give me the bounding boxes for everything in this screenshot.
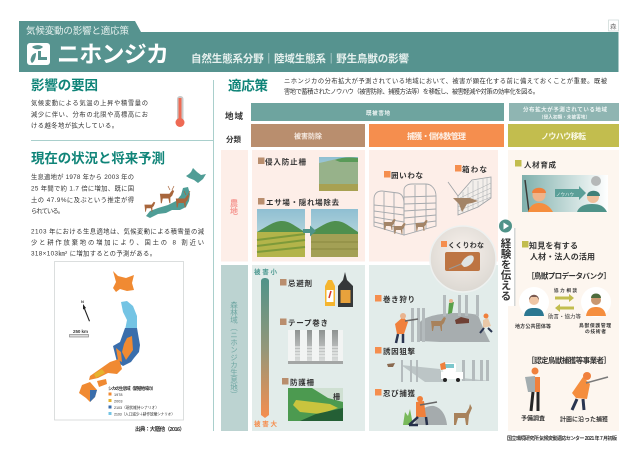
illustration: know-how transfer: ノウハウ — [556, 191, 574, 197]
corner marker — [608, 20, 618, 31]
band: forecast regions: （侵入初期・未被害地） — [539, 114, 590, 120]
band: affected regions — [251, 103, 504, 121]
label: stalking: 忍び捕獲 — [383, 388, 416, 398]
label: corral trap: 囲いわな — [391, 171, 424, 180]
label: wildlife experts: 鳥獣保護管理 — [579, 322, 611, 329]
label: training — [515, 160, 556, 170]
map legend: 2003 — [114, 400, 122, 404]
label: clear feeding grounds: エサ場・隠れ場除去 — [266, 197, 340, 207]
scale bar — [70, 329, 88, 337]
illustration: box trap — [448, 177, 491, 215]
label: planned capture: 計画に沿った捕獲 — [560, 416, 608, 424]
text: future forecast — [31, 226, 205, 258]
text: adaptation intro: 害地で蓄積されたノウハウ（被害防除、捕獲方法等）を移転し、被害軽減や対策の効率化を図る。 — [284, 86, 539, 96]
band: forecast regions: 分布拡大が予測されている地域 — [523, 106, 607, 114]
icon: deer emblem — [27, 43, 50, 65]
illustration: survey worker — [525, 368, 540, 411]
category: damage prevention — [251, 124, 365, 147]
map legend: 2103（現状維持シナリオ） — [114, 405, 159, 410]
callout: pass on experience: 経験を伝える — [500, 237, 512, 301]
map legend: 2103（人口減少＋耕作放棄シナリオ） — [114, 412, 175, 416]
map: Shikoku — [97, 379, 107, 387]
label: expertise: 知見を有する — [529, 240, 578, 250]
illustration: know-how transfer — [522, 175, 608, 212]
label: drive hunting: 巻き狩り — [383, 294, 415, 304]
illustration: data bank exchange: 助言・協力等 — [548, 312, 581, 320]
header banner — [19, 21, 618, 72]
illustration: stalking hunter — [403, 396, 472, 425]
panel: farmland capture — [369, 150, 498, 262]
subtitle: 自然生態系分野｜陸域生態系｜野生鳥獣の影響 — [191, 52, 410, 65]
text: adaptation intro — [284, 76, 608, 96]
band: forecast regions — [509, 103, 619, 121]
label: expertise — [522, 240, 595, 262]
illustration: drive hunting — [395, 295, 492, 343]
text: future forecast: 318×103㎞² に増加するとの予測がある。 — [31, 248, 156, 258]
row label: category: 分類 — [226, 134, 242, 144]
callout circle: snare trap — [430, 226, 496, 292]
map: deer habitat — [54, 262, 184, 420]
panel: forest prevention — [252, 265, 365, 431]
map source: 出典：大膳他（2016） — [135, 425, 185, 433]
map: central Honshu — [113, 328, 140, 366]
corner marker: 森 — [610, 22, 617, 30]
label: protective fence — [282, 377, 314, 387]
label: repellent — [280, 278, 312, 288]
photo: fence field — [319, 157, 358, 191]
map legend: シカの生息域（繁殖地域の） — [108, 385, 156, 392]
scale bar: 250 km — [73, 329, 88, 334]
heading: pro data bank: ［鳥獣プロデータバンク］ — [527, 270, 611, 280]
text: causes body — [31, 98, 148, 130]
illustration: Japan with deer — [144, 168, 206, 218]
heading: adaptation: 適応策 — [228, 78, 268, 94]
map: Hokkaido — [113, 271, 134, 292]
category: capture: 捕獲・個体数管理 — [407, 131, 466, 141]
category: know-how — [508, 124, 619, 147]
icon: repellent bottles — [325, 272, 353, 307]
illustration: truck shooting — [387, 360, 490, 382]
label: pre-survey: 予備調査 — [521, 414, 545, 422]
label: local government: 地方公共団体等 — [515, 323, 551, 330]
text: causes body: ける越冬地が拡大している。 — [31, 120, 118, 130]
heading: present and future: 現在の状況と将来予測 — [31, 150, 165, 166]
illustration: fenced plantation — [288, 388, 343, 421]
gradient bar: damage scale — [261, 278, 269, 418]
illustration: hunter aiming — [572, 372, 608, 410]
text: adaptation intro: ニホンジカの分布拡大が予測されている地域において、被害が顕在化する前に備えておくことが重要。既被 — [284, 76, 608, 85]
illustration: data bank exchange: 協力相談 — [554, 287, 578, 294]
header tab label: 気候変動の影響と適応策 — [26, 25, 129, 37]
illustration: snare in soil — [445, 252, 480, 271]
panel: farmland prevention — [252, 150, 365, 262]
photo: overgrown field — [257, 209, 305, 257]
label: snare trap: くくりわな — [448, 240, 484, 250]
label: more damage: 被害大 — [254, 419, 278, 428]
label: box trap: 箱わな — [462, 164, 488, 174]
map: western Honshu — [89, 359, 122, 380]
text: causes body: 気候変動による気温の上昇や積雪量の — [31, 98, 148, 107]
icon: play arrow — [499, 220, 512, 232]
title: ニホンジカ — [57, 41, 169, 67]
row label: farmland: 農地 — [230, 198, 238, 215]
heading: causes: 影響の要因 — [31, 77, 98, 93]
illustration: corral trap — [374, 184, 436, 235]
row label: forest: 森林域（ニホンジカ生息地） — [229, 300, 238, 398]
photo: cleared field — [311, 209, 358, 257]
icon: thermometer — [176, 96, 184, 127]
panel: forest capture — [369, 265, 498, 431]
label: less damage: 被害小 — [254, 267, 278, 276]
text: present status: 生息適地が 1978 年から 2003 年の — [31, 172, 134, 181]
illustration: fenced plantation: 柵 — [333, 392, 340, 401]
heading: certified operators: ［認定鳥獣捕獲等事業者］ — [527, 355, 611, 365]
category: know-how: ノウハウ移転 — [541, 131, 586, 141]
map: Kyushu — [79, 382, 97, 402]
text: present status: 土の 47.9%に及ぶという推定が得 — [31, 195, 134, 204]
north arrow — [81, 299, 90, 322]
arrow: before to after — [303, 226, 316, 236]
category: capture — [369, 124, 504, 147]
text: future forecast: 2103 年における生息適地は、気候変動による積雪量の減 — [31, 226, 205, 236]
illustration: taped trunks — [288, 330, 343, 364]
label: training: 人材育成 — [524, 160, 556, 170]
row label: forest — [221, 265, 248, 431]
callout: pass on experience — [498, 220, 516, 306]
map legend — [108, 385, 175, 416]
text: present status: 25 年間で約 1.7 倍に増加、既に国 — [31, 184, 134, 192]
label: tape wrap: テープ巻き — [288, 318, 328, 328]
text: present status: られている。 — [31, 207, 64, 215]
north arrow: N — [81, 299, 84, 304]
label: protective fence: 防護柵 — [290, 377, 314, 387]
text: causes body: 減少に伴い、分布の北限や高標高にお — [31, 110, 148, 118]
map legend: 1978 — [114, 393, 122, 397]
row label: farmland — [221, 150, 248, 262]
row label: region: 地域 — [225, 111, 243, 121]
map: northern Honshu — [121, 301, 137, 330]
label: wildlife experts — [579, 322, 611, 335]
label: repellent: 忌避剤 — [288, 278, 312, 288]
label: expertise: 人材・法人の活用 — [530, 252, 595, 262]
text: future forecast: 少と耕作放棄地の増加により、国土の 8 割近い — [31, 238, 204, 246]
label: bait shooting: 誘因狙撃 — [383, 346, 416, 356]
illustration: data bank exchange — [519, 287, 611, 320]
text: present status — [31, 172, 134, 215]
label: fence: 侵入防止柵 — [265, 156, 306, 166]
panel: know-how transfer — [508, 150, 619, 431]
category: damage prevention: 被害防除 — [294, 132, 322, 140]
band: affected regions: 既被害地 — [366, 109, 390, 117]
footer credit: 国立環境研究所 気候変動適応センター 2021 年 7 月初版 — [507, 435, 617, 442]
label: wildlife experts: の技術者 — [585, 328, 606, 335]
